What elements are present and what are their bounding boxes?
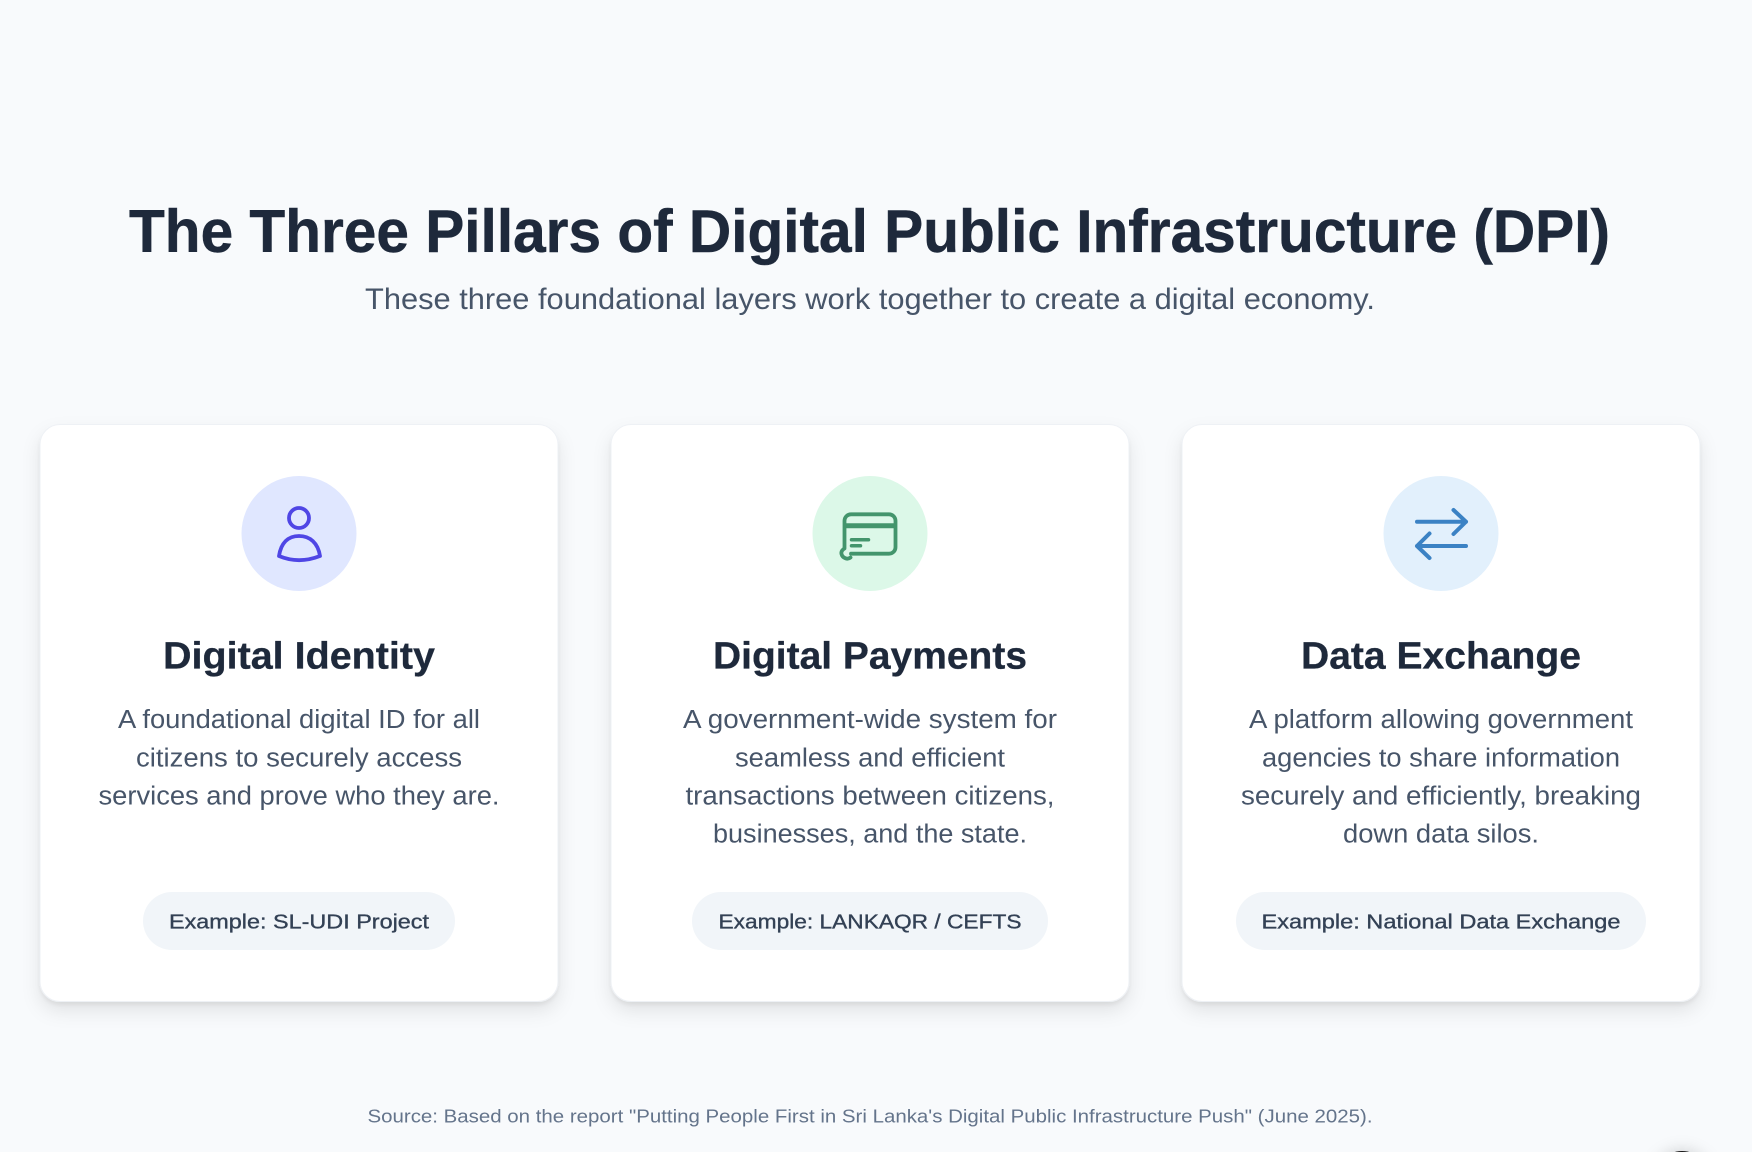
icon: exchange arrows [1384, 476, 1498, 591]
source footnote: Source: Based on the report "Putting People First in Sri Lanka's Digital Public Infrastructure Push" (June 2025). [368, 1106, 1372, 1126]
description: data exchange: securely and efficiently, breaking [1241, 782, 1641, 810]
example pill: LANKAQR: Example: LANKAQR / CEFTS [718, 910, 1022, 934]
example pill: SL-UDI: Example: SL-UDI Project [169, 910, 429, 934]
panel: data exchange [1182, 424, 1700, 1002]
heading: digital payments: Digital Payments [713, 636, 1027, 678]
description: digital payments [683, 706, 1058, 848]
example pill: National Data Exchange: Example: National Data Exchange [1262, 910, 1620, 934]
example pill: National Data Exchange [1236, 892, 1646, 950]
icon: payment card [812, 476, 928, 591]
description: data exchange: A platform allowing government [1249, 706, 1633, 734]
panel: digital identity [40, 424, 558, 1002]
description: digital identity: citizens to securely access [136, 744, 462, 772]
description: data exchange: agencies to share information [1262, 744, 1620, 772]
icon: person [242, 476, 356, 591]
example pill: SL-UDI [143, 892, 455, 950]
example pill: LANKAQR [692, 892, 1048, 950]
description: data exchange [1241, 706, 1641, 848]
description: digital identity [98, 706, 499, 810]
description: digital identity: A foundational digital ID for all [118, 706, 480, 734]
description: data exchange: down data silos. [1343, 820, 1539, 848]
description: digital payments: transactions between citizens, [686, 782, 1054, 810]
description: digital payments: A government-wide system for [683, 706, 1058, 734]
description: digital identity: services and prove who they are. [98, 782, 499, 810]
description: digital payments: businesses, and the state. [713, 820, 1027, 848]
panel: digital payments [611, 424, 1129, 1002]
description: digital payments: seamless and efficient [735, 744, 1005, 772]
title: The Three Pillars of Digital Public Infrastructure (DPI) [129, 198, 1610, 265]
heading: digital identity: Digital Identity [163, 636, 435, 678]
floating button edge [1654, 1151, 1710, 1152]
subtitle: These three foundational layers work together to create a digital economy. [365, 283, 1375, 316]
heading: data exchange: Data Exchange [1301, 636, 1581, 678]
